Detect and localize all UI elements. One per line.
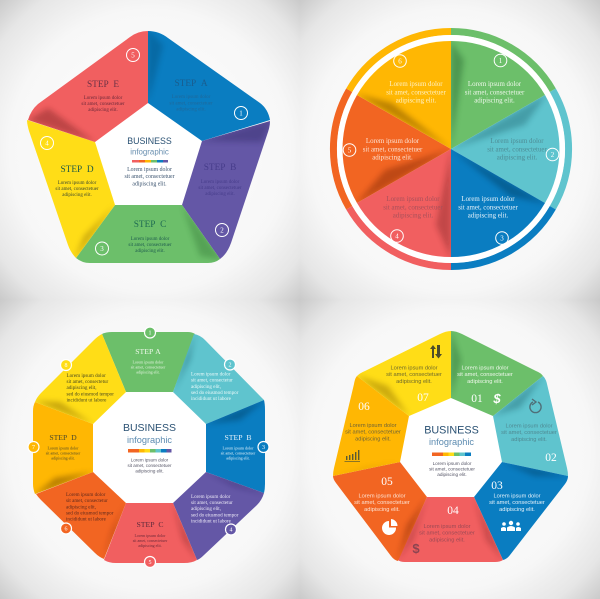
badge numbers: 2: [228, 362, 232, 368]
segment 5: sit amet, consectetuer: [363, 146, 423, 154]
segment 06: 06: [358, 401, 370, 413]
segment 06: [331, 376, 409, 477]
segment: step A: Lorem ipsum dolor: [133, 360, 164, 364]
octagon center white area: [93, 392, 206, 503]
segment 1: sit amet, consectetuer: [465, 90, 525, 96]
segment: step A: Lorem ipsum dolor: [172, 95, 211, 100]
segment 2: [451, 94, 559, 203]
segment 3: adipiscing elit.: [468, 212, 509, 220]
badge numbers: [32, 330, 265, 566]
segment: yellow block: adipiscing elit,: [66, 385, 96, 391]
heptagon center heading: BUSINESS: [424, 424, 479, 436]
segment 02: 02: [545, 452, 557, 464]
segment: step B: adipiscing elit.: [205, 192, 235, 197]
segment: step A: 1: [239, 110, 243, 118]
pentagon center heading: [127, 136, 172, 156]
icon: people: [501, 521, 521, 531]
segment 03: adipiscing elit.: [499, 507, 535, 513]
segment: yellow block: sit amet, consectetur: [66, 379, 109, 385]
segment: yellow block: incididunt ut labore: [66, 398, 107, 404]
number badges: [28, 327, 269, 568]
segment: step E: Lorem ipsum dolor: [84, 96, 123, 101]
segment 04: Lorem ipsum dolor: [423, 524, 471, 530]
segment 05: Lorem ipsum dolor: [358, 494, 406, 500]
segment: step A: sit amet, consectetuer: [169, 102, 213, 106]
segment: step B: adipiscing elit.: [226, 456, 250, 460]
segment 02: Lorem ipsum dolor: [505, 424, 553, 430]
heptagon center text: sit amet, consectetuer: [429, 466, 475, 472]
heptagon center text: Lorem ipsum dolor: [433, 461, 472, 466]
segment 02: adipiscing elit.: [511, 437, 547, 443]
white separator ring: [337, 35, 565, 263]
segment: orange block: sed do eiusmod tempor: [66, 510, 114, 516]
segment 05: adipiscing elit.: [364, 507, 400, 513]
segment 6: adipiscing elit.: [396, 98, 437, 104]
segment: teal block: incididunt ut labore: [191, 396, 232, 402]
segment 01: [451, 330, 543, 416]
segment 3: Lorem ipsum dolor: [461, 196, 515, 203]
segment: step C: adipiscing elit.: [135, 249, 165, 254]
panel: heptagon infographic: [331, 330, 569, 562]
badge numbers: 4: [230, 528, 232, 534]
segment 5: 5: [348, 146, 352, 154]
segment 4: sit amet, consectetuer: [383, 204, 443, 212]
segment: step A: STEP A: [135, 347, 161, 356]
segment: step D: Lorem ipsum dolor: [48, 446, 79, 450]
segment: yellow block: [34, 334, 126, 424]
segment 1: adipiscing elit.: [474, 98, 515, 104]
segment 03: 03: [491, 480, 503, 492]
pentagon center text: adipiscing elit.: [132, 182, 167, 188]
segment 06: sit amet, consectetuer: [345, 430, 401, 436]
segment: purple block: Lorem ipsum dolor: [191, 494, 231, 500]
segment 2: Lorem ipsum dolor: [490, 138, 544, 145]
segment 6: Lorem ipsum dolor: [389, 81, 443, 88]
segment: step B: sit amet, consectetuer: [221, 450, 256, 456]
segment: step C: 3: [100, 245, 104, 253]
segment: step A: adipiscing elit.: [136, 370, 160, 374]
segment: orange block: sit amet, consectetur: [66, 498, 108, 504]
segment: purple block: sit amet, consectetur: [191, 500, 233, 506]
segment: step B: [182, 120, 272, 259]
heptagon center text: [429, 461, 475, 477]
segment: step C: sit amet, consectetuer: [133, 538, 168, 544]
segment: step C: STEP C: [134, 220, 166, 230]
segment 01: Lorem ipsum dolor: [461, 366, 509, 372]
segment 07: Lorem ipsum dolor: [390, 366, 438, 372]
segment: step B: Lorem ipsum dolor: [201, 180, 240, 185]
segment 04: 04: [447, 505, 459, 517]
segment 05: [333, 462, 427, 562]
segment 02: sit amet, consectetuer: [501, 430, 557, 436]
octagon center text: sit amet, consectetuer: [127, 463, 172, 468]
icon: up down arrows: [430, 345, 442, 358]
badge numbers: 5: [148, 560, 152, 566]
segment 07: sit amet, consectetuer: [386, 372, 442, 378]
icon: pie chart: [382, 519, 398, 535]
segment: step A: [148, 30, 270, 141]
segment 6: sit amet, consectetuer: [386, 90, 446, 96]
segment 06: Lorem ipsum dolor: [349, 423, 397, 429]
pentagon center text: [124, 167, 175, 188]
segment 1: [451, 41, 545, 149]
octagon center heading: BUSINESS: [123, 422, 176, 434]
octagon center text: [127, 458, 172, 474]
segment: step B: STEP B: [204, 163, 236, 173]
segment 01: 01: [471, 393, 483, 405]
segment 03: Lorem ipsum dolor: [493, 494, 541, 500]
rainbow bar: [132, 160, 168, 162]
segment: step E: 5: [131, 52, 135, 60]
segment: step D: sit amet, consectetuer: [55, 187, 99, 192]
segment 03: [474, 462, 569, 560]
panel: circle infographic: [333, 31, 569, 267]
icon: bar chart: [344, 450, 360, 462]
segment: step B: 2: [220, 226, 224, 234]
segment: purple block: sed do eiusmod tempor: [191, 512, 239, 518]
badge numbers: 7: [32, 445, 35, 451]
segment: step D: STEP D: [60, 165, 94, 175]
heptagon center heading: infographic: [429, 437, 474, 447]
segment 02: [493, 375, 568, 476]
segment: teal block: sit amet, consectetur: [191, 378, 233, 384]
segment 5: [343, 95, 451, 204]
icon: dollar: $: [492, 391, 501, 406]
segment: step B: sit amet, consectetuer: [198, 186, 242, 191]
octagon center heading: [123, 422, 176, 445]
outer ring: [333, 31, 569, 267]
segment: step D: adipiscing elit.: [51, 456, 75, 460]
segment: step D: Lorem ipsum dolor: [58, 181, 97, 186]
rainbow bar: [128, 449, 172, 452]
segment 04: adipiscing elit.: [429, 538, 465, 544]
segment: yellow block: sed do eiusmod tempor: [66, 392, 114, 398]
segment: step D: adipiscing elit.: [62, 193, 92, 198]
octagon center text: adipiscing elit.: [135, 468, 164, 474]
segment 07: [356, 331, 451, 416]
badge numbers: 8: [64, 363, 68, 369]
segment: orange block: incididunt ut labore: [66, 516, 107, 522]
segment: step D: 4: [45, 140, 49, 148]
segment: teal block: sed do eiusmod tempor: [191, 390, 239, 396]
segment 2: 2: [551, 151, 555, 159]
segment 6: 6: [398, 58, 402, 66]
segment 3: 3: [500, 234, 504, 242]
badge numbers: 6: [64, 526, 68, 532]
segment: step C: STEP C: [137, 520, 163, 529]
octagon center text: Lorem ipsum dolor: [131, 458, 169, 462]
pentagon center text: sit amet, consectetuer: [124, 174, 175, 180]
panel: pentagon infographic: [27, 30, 272, 263]
segment: orange block: adipiscing elit,: [66, 504, 96, 510]
segment 05: sit amet, consectetuer: [354, 500, 410, 506]
segment: orange block: [36, 472, 126, 560]
segment 6: [356, 41, 451, 149]
segment: step A: adipiscing elit.: [176, 108, 206, 112]
octagon center heading: infographic: [127, 435, 172, 445]
segment 2: adipiscing elit.: [497, 154, 538, 162]
segment: step C: [76, 205, 222, 263]
segment 01: sit amet, consectetuer: [457, 372, 513, 378]
segment: orange block: Lorem ipsum dolor: [66, 492, 106, 498]
segment 04: sit amet, consectetuer: [419, 530, 475, 536]
segment: purple block: adipiscing elit,: [191, 506, 221, 512]
segment: teal block: Lorem ipsum dolor: [191, 372, 231, 378]
segment 01: adipiscing elit.: [467, 379, 503, 385]
panel: octagon infographic: [28, 327, 269, 568]
segment 4: adipiscing elit.: [393, 212, 434, 220]
segment: step D: sit amet, consectetuer: [46, 450, 81, 456]
segment: step B: STEP B: [225, 433, 251, 442]
segment: step E: [28, 31, 148, 142]
segment: step D: [27, 120, 115, 260]
segment: purple block: incididunt ut labore: [191, 518, 232, 524]
segment 05: 05: [381, 476, 393, 488]
segment 3: [451, 149, 547, 257]
segment: purple block: [173, 472, 266, 560]
badge numbers: 1: [148, 330, 152, 336]
segment: step A: STEP A: [174, 79, 208, 89]
heptagon center heading: [424, 424, 479, 447]
segment 1: 1: [499, 57, 503, 65]
pentagon center heading: BUSINESS: [127, 136, 172, 146]
rainbow bar: [432, 452, 471, 456]
segment 06: adipiscing elit.: [355, 436, 391, 442]
segment: step D: STEP D: [49, 433, 77, 442]
segment 5: Lorem ipsum dolor: [366, 138, 420, 145]
segment: step B: Lorem ipsum dolor: [223, 446, 254, 450]
segment: step B: [206, 399, 266, 493]
segment: step C: sit amet, consectetuer: [128, 243, 172, 248]
segment: step C: Lorem ipsum dolor: [135, 533, 166, 538]
segment: step D: [33, 402, 93, 496]
segment: step C: [104, 503, 198, 563]
segment 5: adipiscing elit.: [372, 154, 413, 162]
heptagon center white area: [400, 398, 502, 497]
segment: step A: sit amet, consectetuer: [131, 364, 166, 370]
segment: step A: [102, 332, 195, 392]
segment 04: [397, 497, 504, 562]
segment 1: Lorem ipsum dolor: [468, 81, 522, 88]
segment 3: sit amet, consectetuer: [458, 204, 518, 212]
segment: step E: STEP E: [87, 80, 119, 90]
segment 07: 07: [417, 392, 429, 404]
segment 4: [357, 149, 451, 258]
segment 03: sit amet, consectetuer: [489, 500, 545, 506]
segment: teal block: adipiscing elit,: [191, 384, 221, 390]
pentagon center text: Lorem ipsum dolor: [127, 167, 172, 173]
pentagon center white area: [95, 103, 202, 205]
segment: step E: sit amet, consectetuer: [81, 102, 125, 107]
segment 2: sit amet, consectetuer: [487, 146, 547, 154]
segment: step E: adipiscing elit.: [88, 108, 118, 113]
segment: teal block: [173, 333, 264, 424]
badge numbers: 3: [262, 445, 265, 451]
segment: yellow block: Lorem ipsum dolor: [66, 373, 106, 379]
icon: refresh arrow: [530, 399, 541, 413]
segment 07: adipiscing elit.: [396, 379, 432, 385]
segment: step C: Lorem ipsum dolor: [131, 237, 170, 242]
heptagon center text: adipiscing elit.: [437, 472, 467, 477]
segment 4: 4: [395, 232, 399, 240]
icon: dollar: $: [412, 541, 420, 556]
segment: step C: adipiscing elit.: [138, 543, 162, 548]
pentagon center heading: infographic: [130, 148, 169, 156]
segment 4: Lorem ipsum dolor: [386, 196, 440, 203]
